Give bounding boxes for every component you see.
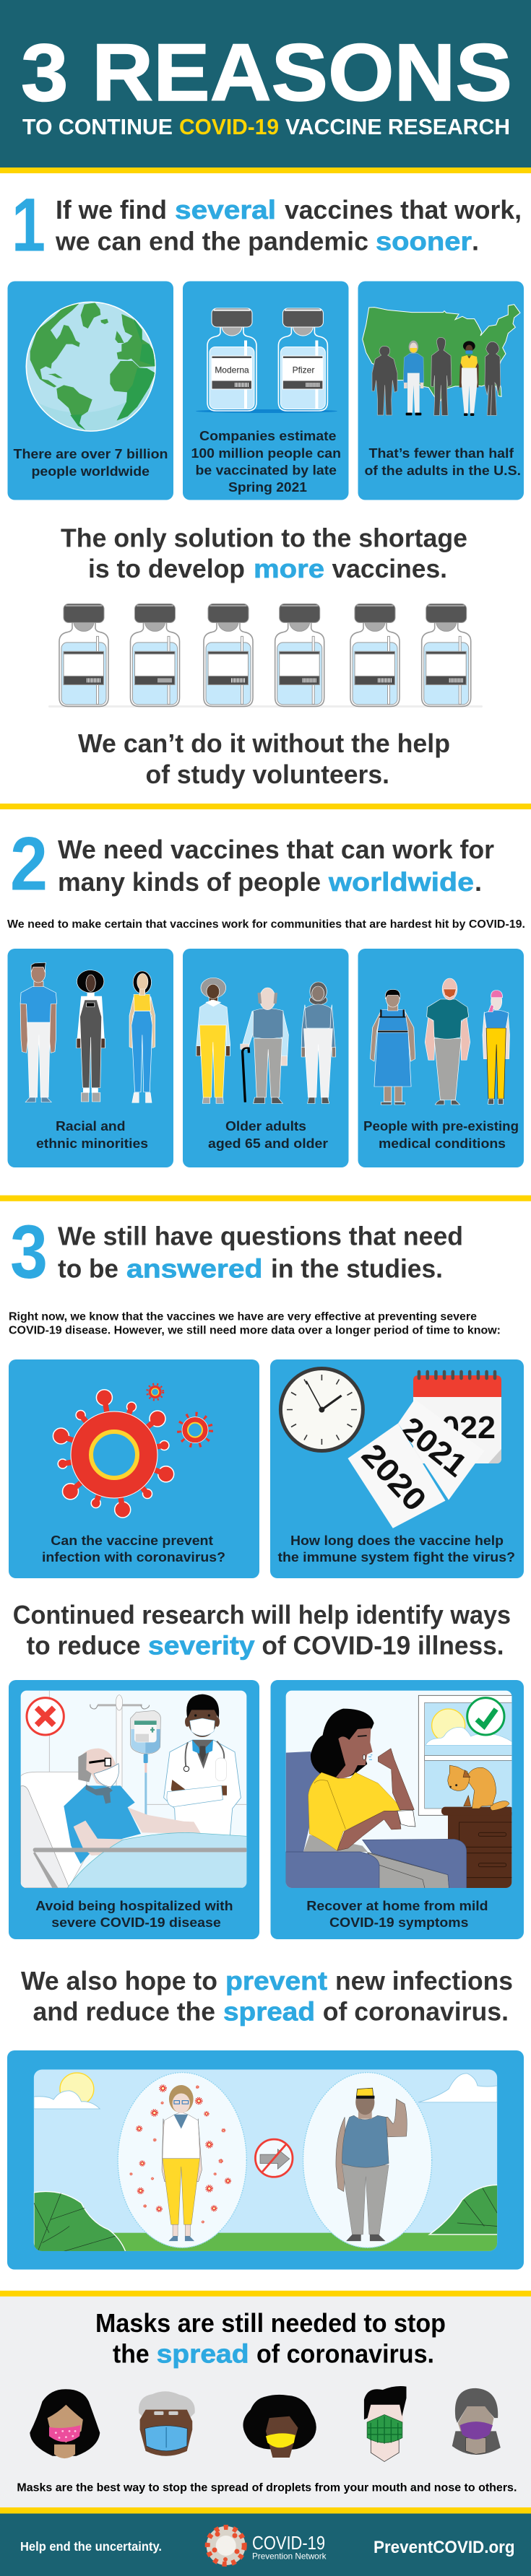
face: blue mask xyxy=(139,2391,195,2456)
footer url: PreventCOVID.org xyxy=(374,2538,515,2557)
caption: How long does the vaccine help xyxy=(290,1533,504,1548)
section 1 heading: If we find xyxy=(56,195,167,225)
people group xyxy=(370,978,509,1105)
prevention statement: We also hope to xyxy=(21,1966,217,1996)
caption: COVID-19 symptoms xyxy=(329,1915,468,1930)
icon: calendar xyxy=(348,1372,501,1528)
shortage statement: The only solution to the shortage xyxy=(61,523,467,552)
mask caption: Masks are the best way to stop the spread of droplets from your mouth and nose to others. xyxy=(17,2482,517,2494)
face: green mask xyxy=(364,2386,406,2462)
bubble: infected woman xyxy=(118,2073,246,2248)
caption xyxy=(35,1898,233,1930)
hospital scene xyxy=(21,1691,247,1889)
caption: Racial and xyxy=(56,1118,126,1133)
panel: prevent infection xyxy=(9,1359,259,1578)
person: man in blue sweater xyxy=(403,341,424,415)
caption: severe COVID-19 disease xyxy=(51,1915,221,1930)
icon: Pfizer vial xyxy=(278,308,327,411)
prevention statement xyxy=(21,1966,513,2026)
row of six vials xyxy=(48,604,483,708)
section 3 intro xyxy=(9,1311,501,1336)
sun and clouds xyxy=(34,2073,497,2109)
caption: There are over 7 billion xyxy=(13,446,168,461)
caption: Spring 2021 xyxy=(228,479,307,495)
section 3 intro: COVID-19 disease. However, we still need more data over a longer period of time to know: xyxy=(9,1324,501,1336)
section 2 intro: We need to make certain that vaccines work for communities that are hardest hit by COVID-19. xyxy=(7,918,525,931)
caption xyxy=(191,428,341,495)
section 2 heading xyxy=(10,822,494,907)
section 3 heading: 3 xyxy=(10,1210,48,1294)
icon: Moderna vial: Moderna xyxy=(215,365,249,375)
subtitle: TO CONTINUE xyxy=(22,114,173,139)
caption: Older adults xyxy=(225,1118,306,1133)
face: purple mask xyxy=(452,2388,501,2455)
footer tagline: Help end the uncertainty. xyxy=(20,2539,162,2554)
section 1 heading: we can end the pandemic xyxy=(55,227,368,256)
mask statement: Masks are still needed to stop xyxy=(95,2308,446,2338)
section 3 intro: Right now, we know that the vaccines we have are very effective at preventing severe xyxy=(9,1311,477,1323)
logo: wordmark: Prevention Network xyxy=(252,2551,327,2562)
volunteers statement: We can’t do it without the help xyxy=(78,728,450,758)
shortage statement: more xyxy=(254,554,324,583)
section 3 heading: answered xyxy=(126,1253,263,1283)
caption: be vaccinated by late xyxy=(195,462,337,478)
panel: prevent spread scene xyxy=(7,2050,524,2270)
panel: racial and ethnic minorities xyxy=(7,949,173,1167)
mask statement: the xyxy=(113,2339,150,2369)
icon: US map with people xyxy=(363,305,520,416)
caption xyxy=(42,1533,225,1565)
panel: how long xyxy=(270,1359,524,1578)
section 1 heading: sooner xyxy=(376,227,472,256)
icon: red X xyxy=(27,1698,64,1735)
footer xyxy=(0,2507,531,2576)
vial shadow xyxy=(196,409,337,413)
mask statement: of coronavirus. xyxy=(256,2339,434,2369)
header banner xyxy=(0,0,531,173)
caption xyxy=(277,1533,515,1565)
doctor xyxy=(164,1694,241,1836)
panel: pre-existing conditions xyxy=(358,949,524,1167)
page 2020 xyxy=(348,1423,445,1528)
panel: fewer than half xyxy=(358,282,524,500)
subtitle: VACCINE RESEARCH xyxy=(285,114,510,139)
caption: ethnic minorities xyxy=(36,1136,148,1151)
woman xyxy=(303,1709,449,1889)
caption xyxy=(364,445,521,478)
section 1 heading: several xyxy=(175,195,276,225)
subtitle: COVID-19 xyxy=(179,114,279,139)
caption: Companies estimate xyxy=(199,428,337,443)
severity statement: of COVID-19 illness. xyxy=(262,1631,504,1661)
severity statement: Continued research will help identify ways xyxy=(13,1600,511,1629)
severity statement: to reduce xyxy=(27,1631,141,1661)
bushes xyxy=(34,2185,498,2253)
section 3 heading: We still have questions that need xyxy=(58,1222,463,1250)
panel: hospital xyxy=(9,1680,259,1939)
logo: wordmark: COVID-19 xyxy=(252,2532,325,2554)
caption xyxy=(306,1898,488,1930)
section 2 heading: 2 xyxy=(10,822,48,907)
dresser xyxy=(441,1807,514,1889)
section 1 heading: . xyxy=(472,227,479,256)
logo: virus xyxy=(207,2526,246,2565)
volunteers statement xyxy=(78,728,450,789)
masked faces xyxy=(30,2386,501,2462)
mask statement xyxy=(95,2308,446,2369)
people group xyxy=(197,978,336,1103)
title: 3 REASONS xyxy=(21,27,512,118)
shortage statement: vaccines. xyxy=(332,554,447,583)
caption xyxy=(208,1118,328,1151)
icon: calendar: 2022 xyxy=(423,1410,496,1445)
mask statement: spread xyxy=(157,2339,249,2369)
caption: People with pre-existing xyxy=(363,1118,519,1133)
section 3 heading: in the studies. xyxy=(271,1253,443,1283)
caption: Avoid being hospitalized with xyxy=(35,1898,233,1913)
shortage statement xyxy=(61,523,467,583)
page 2020: 2020 xyxy=(355,1437,433,1518)
volunteers statement: of study volunteers. xyxy=(146,760,389,789)
icon: small coronavirus xyxy=(147,1384,163,1400)
icon: globe xyxy=(26,302,157,438)
section 1 heading xyxy=(12,183,522,268)
page 2021: 2021 xyxy=(394,1410,473,1484)
section 3 heading xyxy=(10,1210,463,1294)
prevention statement: of coronavirus. xyxy=(323,1997,509,2026)
icon: Moderna vial xyxy=(207,308,256,411)
section 2 heading: We need vaccines that can work for xyxy=(58,835,494,864)
cat xyxy=(448,1765,509,1811)
caption: Can the vaccine prevent xyxy=(51,1533,213,1548)
icon: medium coronavirus xyxy=(179,1414,211,1446)
caption: aged 65 and older xyxy=(208,1136,328,1151)
caption: Recover at home from mild xyxy=(306,1898,488,1913)
blanket and rail xyxy=(33,1832,247,1889)
section 2 heading: worldwide xyxy=(328,867,474,897)
icon: coronavirus xyxy=(53,1390,174,1518)
panel: older adults xyxy=(183,949,348,1167)
section 2 heading: many kinds of people xyxy=(58,867,321,897)
icon: clock xyxy=(280,1369,363,1451)
shortage statement: is to develop xyxy=(88,554,245,583)
window xyxy=(418,1695,515,1815)
face: pink mask xyxy=(30,2389,100,2458)
severity statement: severity xyxy=(148,1631,255,1661)
section 2 heading: . xyxy=(475,867,482,897)
people group xyxy=(20,962,155,1102)
caption: That’s fewer than half xyxy=(368,445,514,461)
armchair seat xyxy=(286,1839,467,1889)
bubble: protected man xyxy=(303,2073,432,2248)
icon: no transmission arrow xyxy=(255,2139,293,2177)
person: woman in yellow top xyxy=(459,341,479,416)
subtitle xyxy=(22,114,510,139)
patient xyxy=(64,1749,202,1864)
prevention statement: prevent xyxy=(225,1966,327,1996)
home scene xyxy=(286,1691,515,1889)
face: yellow mask xyxy=(243,2395,316,2458)
severity statement xyxy=(13,1600,511,1661)
bed xyxy=(21,1772,87,1888)
caption: of the adults in the U.S. xyxy=(364,463,521,478)
page 2021 xyxy=(394,1399,484,1500)
caption: 100 million people can xyxy=(191,445,341,461)
caption xyxy=(363,1118,519,1151)
caption xyxy=(13,446,168,479)
prevention statement: spread xyxy=(223,1997,315,2026)
caption: medical conditions xyxy=(379,1136,506,1151)
caption: infection with coronavirus? xyxy=(42,1549,225,1565)
section 3 heading: to be xyxy=(58,1253,118,1283)
IV stand xyxy=(90,1695,160,1816)
logo: wordmark xyxy=(252,2532,327,2562)
icon: Pfizer vial: Pfizer xyxy=(293,365,314,375)
panel: 7 billion people xyxy=(7,282,173,500)
caption: people worldwide xyxy=(32,464,150,479)
section 1 heading: vaccines that work, xyxy=(285,195,522,225)
caption xyxy=(36,1118,148,1151)
prevention statement: and reduce the xyxy=(33,1997,215,2026)
panel: vaccine estimates xyxy=(183,282,348,500)
prevention statement: new infections xyxy=(335,1966,513,1996)
section 1 heading: 1 xyxy=(12,183,46,268)
caption: the immune system fight the virus? xyxy=(277,1549,515,1565)
armchair back xyxy=(286,1752,321,1852)
panel: recover at home xyxy=(270,1680,524,1939)
